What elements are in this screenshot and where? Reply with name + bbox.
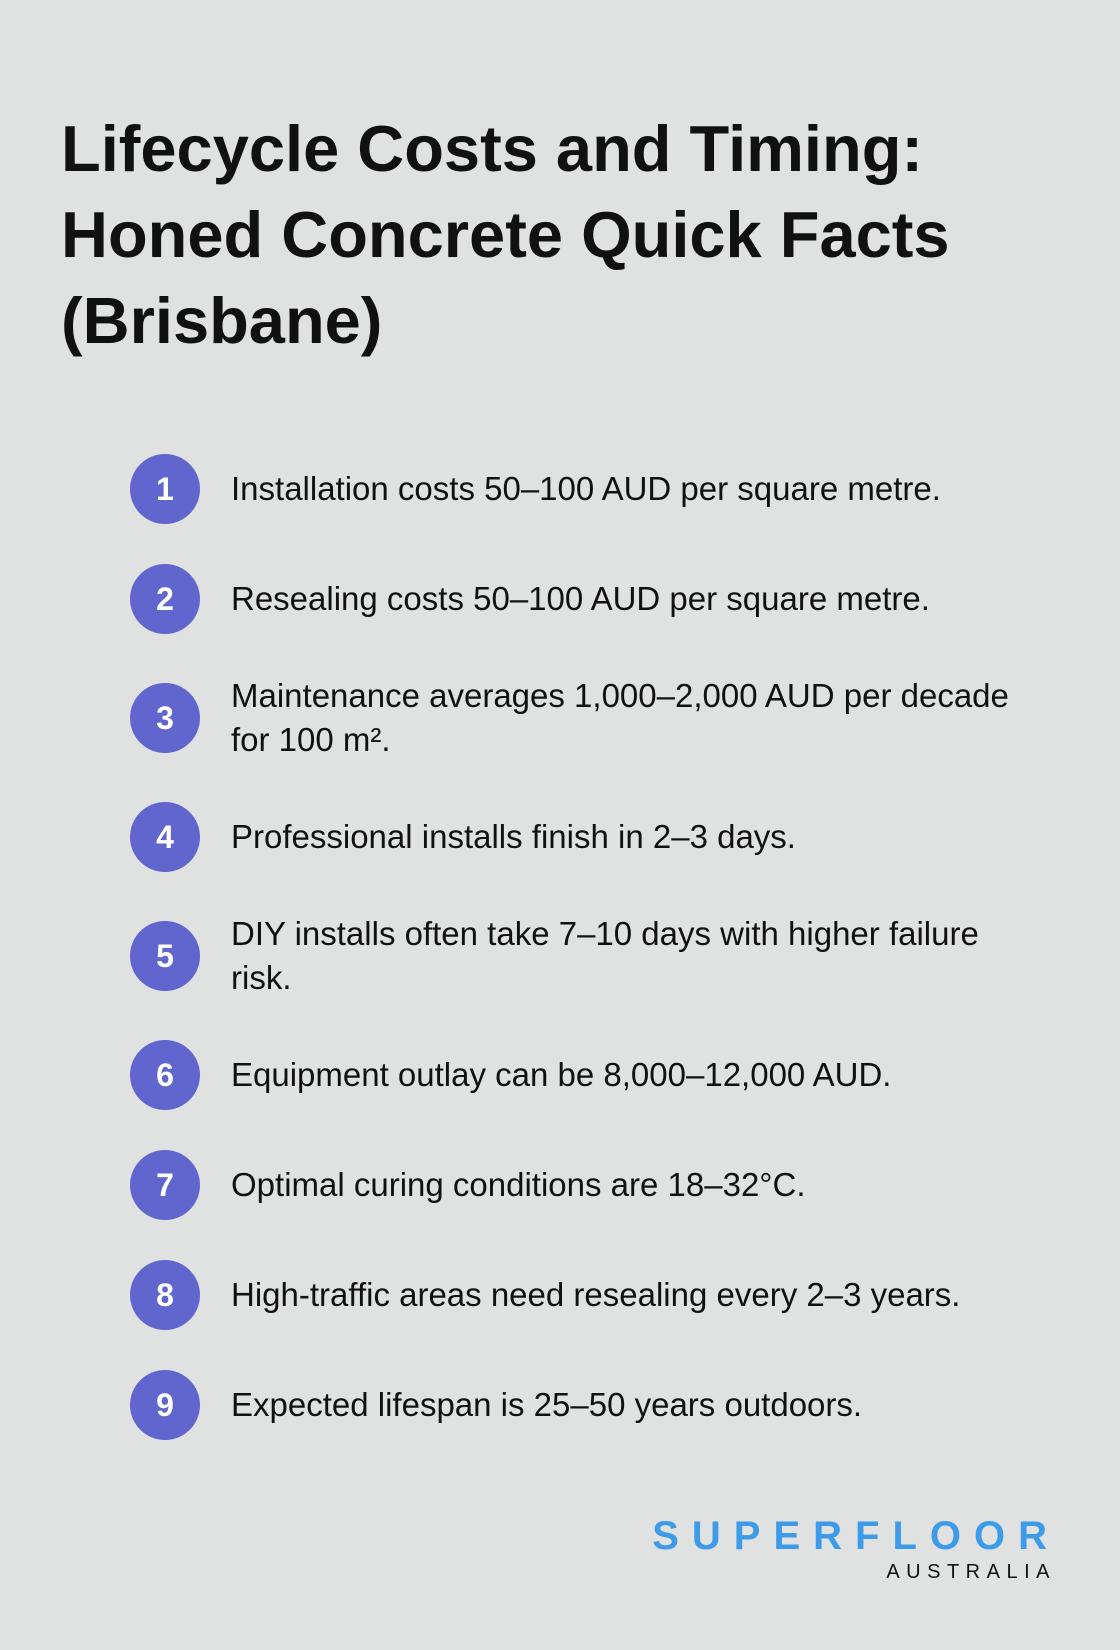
item 7: 7 xyxy=(156,1167,174,1203)
item 5: risk. xyxy=(231,959,292,996)
item 9: 9 xyxy=(156,1387,174,1423)
item 3 xyxy=(130,677,1009,758)
item 4 xyxy=(130,802,796,872)
item 3: for 100 m². xyxy=(231,721,391,758)
item 5: DIY installs often take 7–10 days with higher failure xyxy=(231,915,979,952)
title xyxy=(61,112,950,357)
item 4: Professional installs finish in 2–3 days. xyxy=(231,818,796,855)
item 6: Equipment outlay can be 8,000–12,000 AUD. xyxy=(231,1056,891,1093)
item 5 xyxy=(130,915,979,996)
item 8 xyxy=(130,1260,960,1330)
item 2 xyxy=(130,564,930,634)
logo: SUPERFLOOR xyxy=(652,1514,1060,1558)
item 5: 5 xyxy=(156,938,174,974)
item 2: Resealing costs 50–100 AUD per square metre. xyxy=(231,580,930,617)
item 7: Optimal curing conditions are 18–32°C. xyxy=(231,1166,806,1203)
item 9 xyxy=(130,1370,862,1440)
item 3: 3 xyxy=(156,700,174,736)
item 2: 2 xyxy=(156,581,174,617)
item 6 xyxy=(130,1040,891,1110)
item 6: 6 xyxy=(156,1057,174,1093)
item 1: 1 xyxy=(156,471,174,507)
item 1: Installation costs 50–100 AUD per square metre. xyxy=(231,470,941,507)
title: Honed Concrete Quick Facts xyxy=(61,198,950,271)
item 1 xyxy=(130,454,941,524)
item 7 xyxy=(130,1150,806,1220)
title: Lifecycle Costs and Timing: xyxy=(61,112,923,185)
title: (Brisbane) xyxy=(61,284,382,357)
logo xyxy=(652,1514,1060,1583)
item 3: Maintenance averages 1,000–2,000 AUD per decade xyxy=(231,677,1009,714)
item 9: Expected lifespan is 25–50 years outdoors. xyxy=(231,1386,862,1423)
item 8: 8 xyxy=(156,1277,174,1313)
item 4: 4 xyxy=(156,819,174,855)
item 8: High-traffic areas need resealing every 2–3 years. xyxy=(231,1276,960,1313)
logo: AUSTRALIA xyxy=(886,1561,1056,1583)
